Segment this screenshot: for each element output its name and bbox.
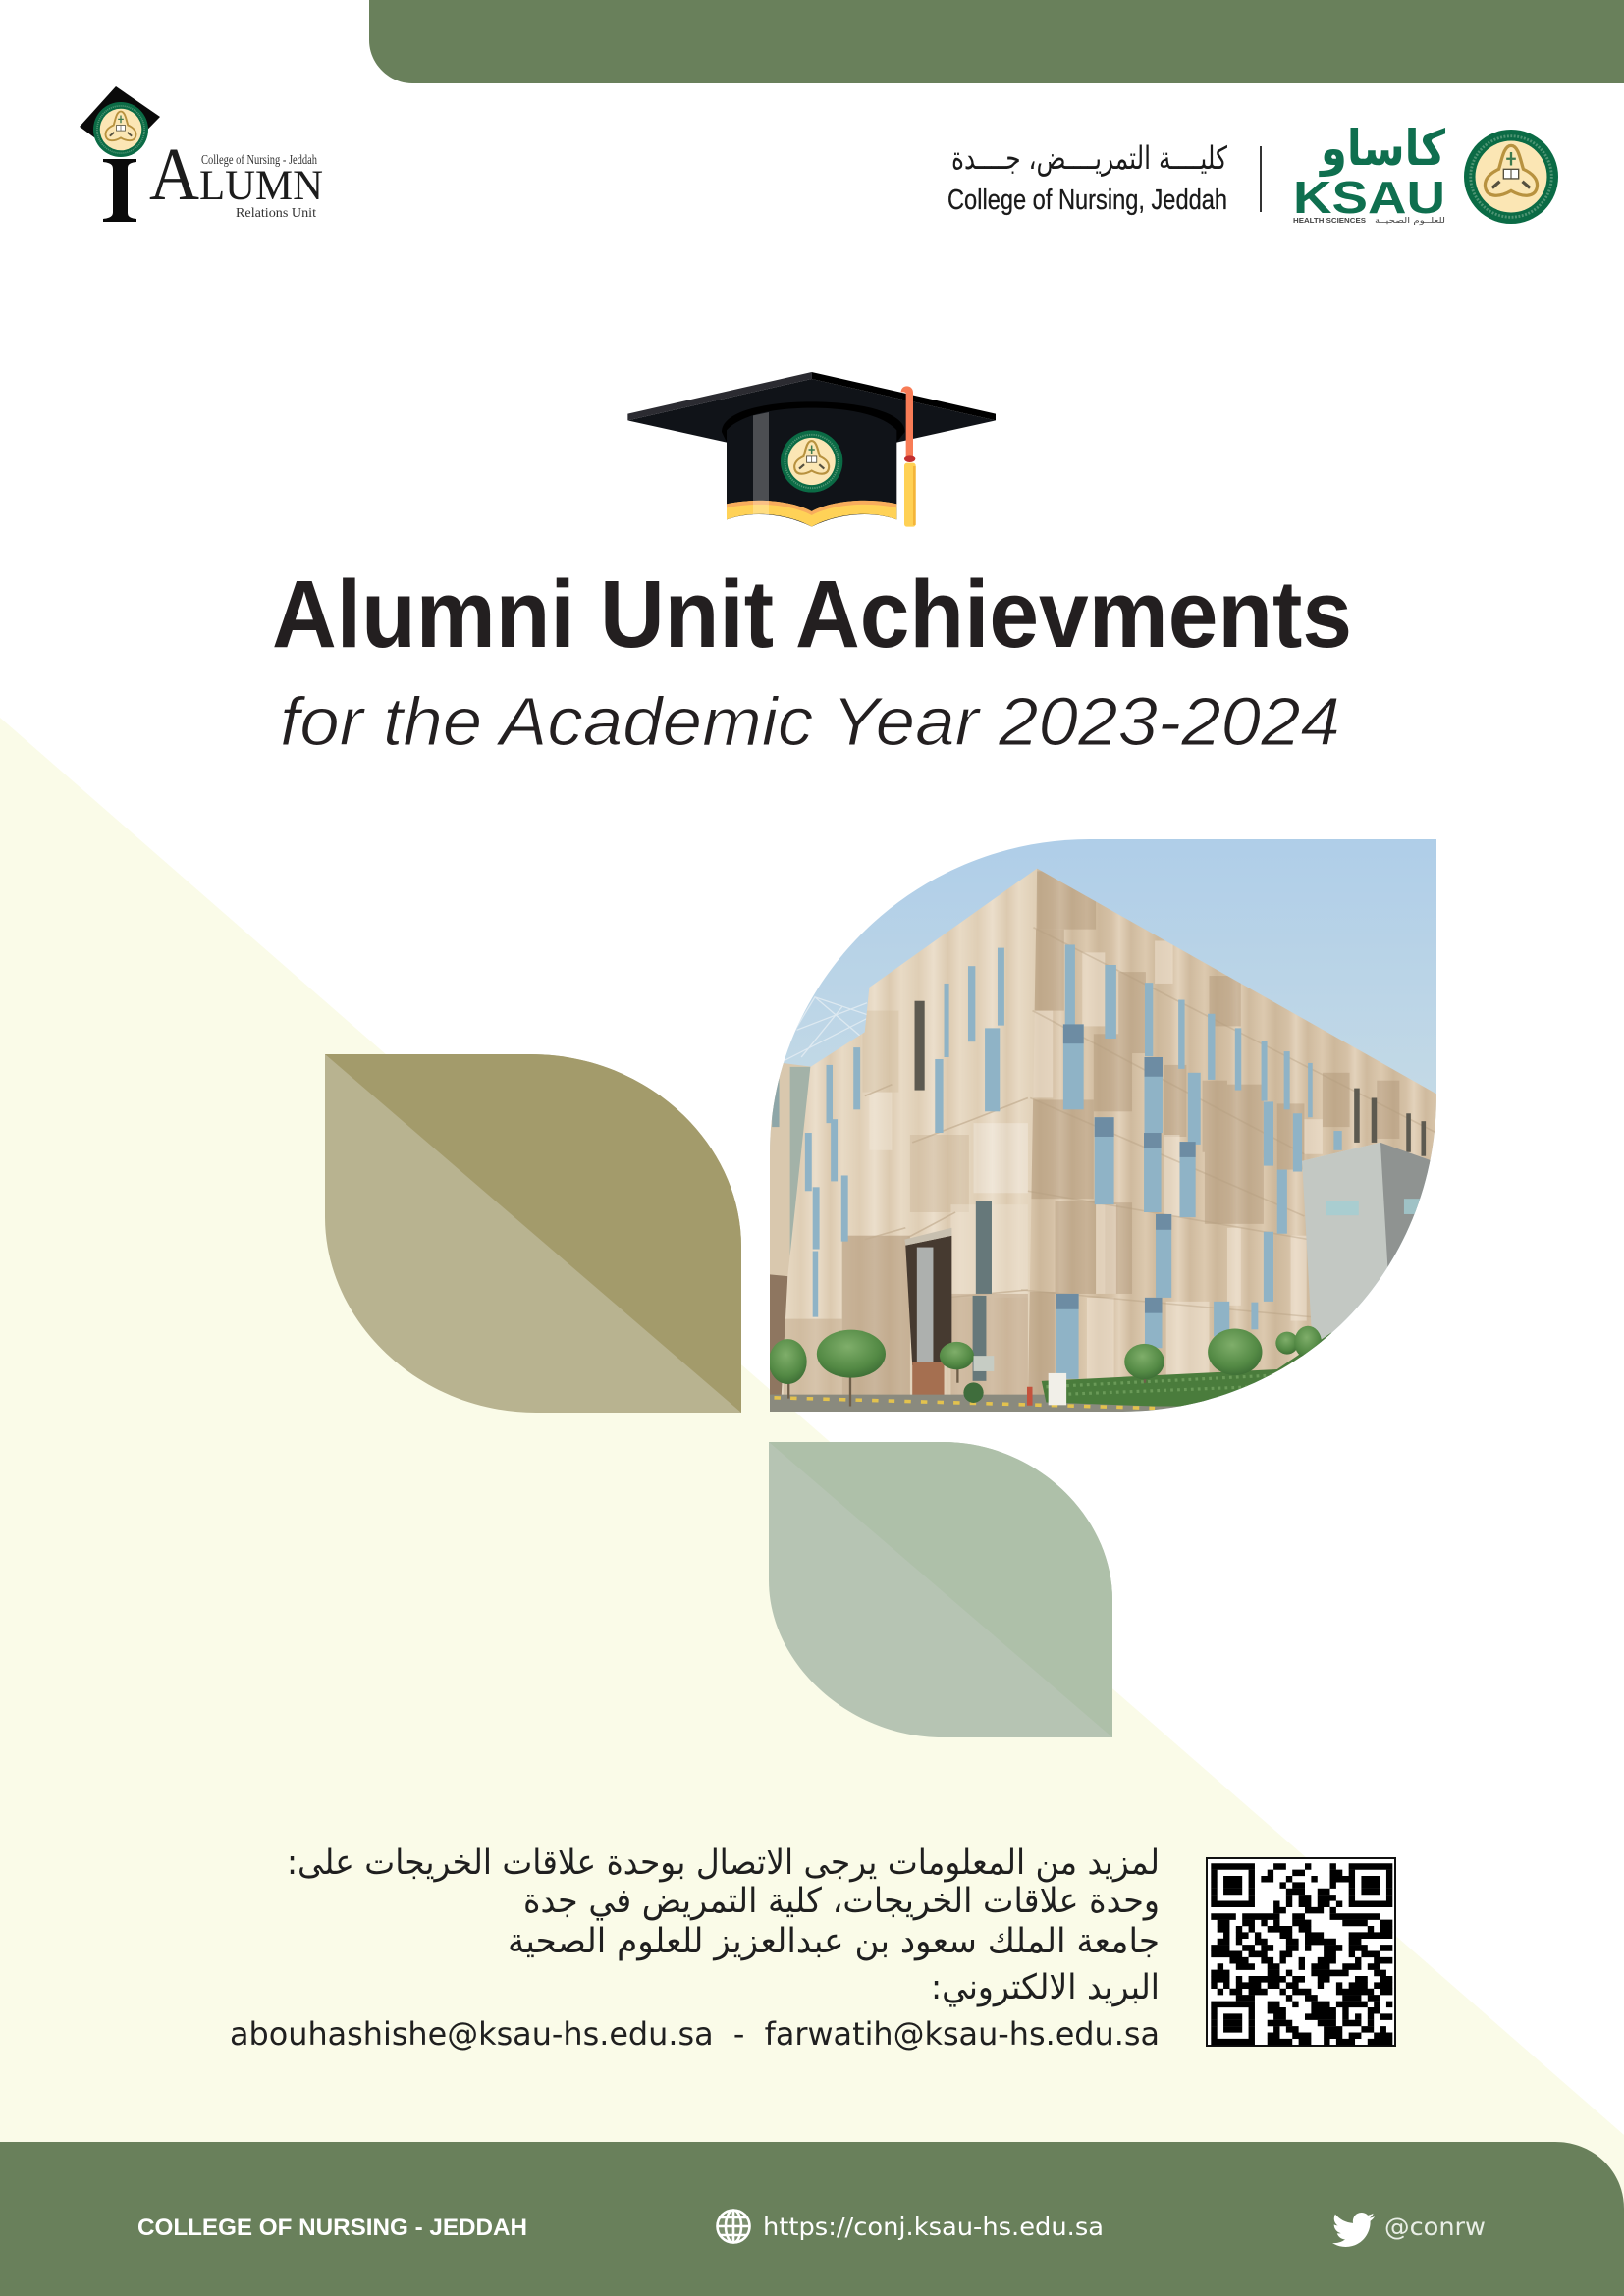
college of nursing name: [947, 139, 1228, 216]
footer: website: https://conj.ksau-hs.edu.sa: [763, 2213, 1104, 2241]
background: cream diagonal: [0, 718, 1624, 2296]
footer: college name: COLLEGE OF NURSING - JEDDAH: [137, 2215, 527, 2241]
contact text: abouhashishe@ksau-hs.edu.sa - farwatih@ksau-hs.edu.sa: [230, 2015, 1160, 2053]
logo: alumni relations unit: Relations Unit: [236, 206, 316, 221]
college of nursing name: كليــــة التمريــــض، جــــدة: [951, 139, 1228, 177]
title: Alumni Unit Achievments: [272, 561, 1352, 667]
icon: globe: [717, 2211, 750, 2242]
contact text: لمزيد من المعلومات يرجى الاتصال بوحدة علاقات الخريجات على:: [287, 1843, 1160, 1883]
contact text: البريد الالكتروني:: [931, 1968, 1160, 2007]
subtitle: for the Academic Year 2023-2024: [280, 683, 1340, 760]
header divider: [1260, 146, 1262, 212]
footer green bar: [0, 2142, 1624, 2296]
logo: KSAU: كاساو: [1318, 120, 1446, 178]
logo: KSAU: [1293, 120, 1446, 225]
logo: university seal: [1464, 130, 1558, 224]
logo: KSAU: للعلــوم الصحيــة: [1375, 216, 1445, 225]
logo: alumni relations unit: A: [149, 133, 199, 216]
footer: twitter handle: @conrw: [1384, 2213, 1486, 2241]
top green bar: [369, 0, 1624, 83]
leaf: building photo: [770, 839, 1436, 1412]
icon: graduation cap: [627, 372, 996, 527]
contact text: وحدة علاقات الخريجات، كلية التمريض في جدة: [523, 1882, 1160, 1921]
logo: alumni relations unit: College of Nursing - Jeddah: [201, 152, 317, 167]
logo: KSAU: HEALTH SCIENCES: [1293, 216, 1366, 225]
contact text: [230, 1843, 1160, 2053]
icon: twitter bird: [1332, 2213, 1375, 2247]
logo: alumni relations unit: LUMN: [199, 163, 323, 209]
QR code: [1207, 1858, 1395, 2046]
logo: KSAU: KSAU: [1293, 172, 1445, 223]
logo: alumni relations unit: [80, 86, 323, 222]
leaf: olive: [325, 1054, 741, 1413]
college of nursing name: College of Nursing, Jeddah: [947, 185, 1227, 216]
leaf: sage: [769, 1442, 1112, 1737]
contact text: جامعة الملك سعود بن عبدالعزيز للعلوم الصحية: [508, 1922, 1160, 1961]
